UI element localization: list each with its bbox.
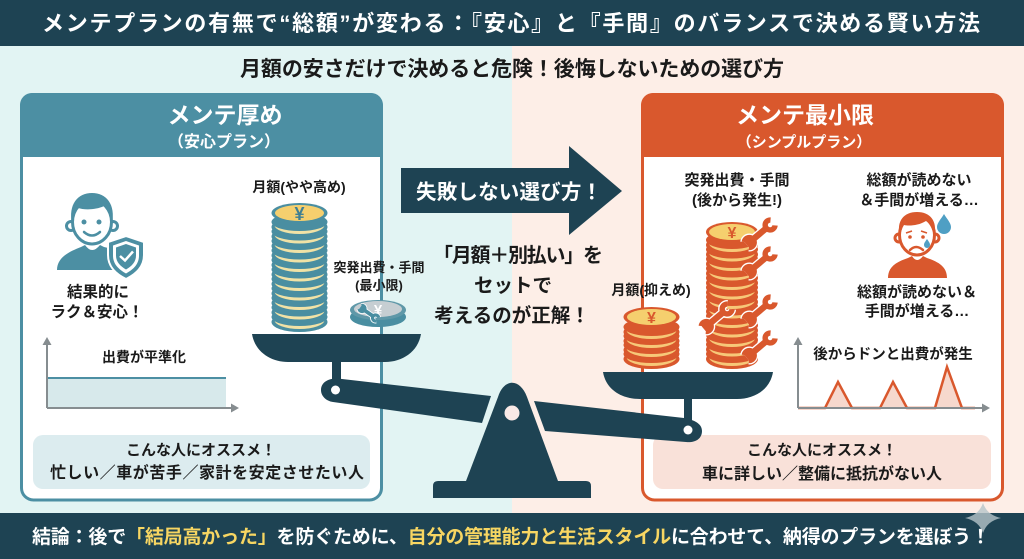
label: sudden costs later <box>684 171 790 209</box>
chart: flat spending: 出費が平準化 <box>102 349 186 365</box>
text: the right answer: 「月額＋別払い」を <box>433 244 603 267</box>
coin stack: monthly reduced: ¥ <box>647 310 656 327</box>
chart: spending spikes: 後からドンと出費が発生 <box>813 345 973 363</box>
icon: worried person with sweat drop <box>888 212 951 278</box>
callout: recommended for left <box>33 435 370 489</box>
left panel header: （安心プラン） <box>168 132 280 151</box>
text: easy and safe <box>50 282 144 321</box>
right panel header: メンテ最小限 <box>736 102 874 128</box>
scale fulcrum <box>433 383 591 498</box>
label: monthly higher: 月額(やや高め) <box>252 179 346 195</box>
label: sudden costs minimal <box>333 260 425 293</box>
left pan <box>252 334 421 384</box>
subtitle: 月額の安さだけで決めると危険！後悔しないための選び方 <box>240 58 784 81</box>
chart: spending spikes <box>794 337 990 412</box>
coin stack: monthly fee <box>272 203 328 332</box>
right panel frame <box>642 94 1002 500</box>
callout: recommended for right <box>653 435 991 489</box>
coin stack: monthly reduced <box>624 307 680 369</box>
conclusion bar <box>0 503 1024 559</box>
callout: recommended for left: こんな人にオススメ！ <box>126 442 276 459</box>
label: sudden costs later: 突発出費・手間 <box>684 171 790 189</box>
coin stack: monthly fee: ¥ <box>294 204 305 224</box>
right pan <box>603 372 773 423</box>
scale beam <box>321 378 702 442</box>
left panel frame <box>22 94 382 500</box>
icon: smiling person with shield <box>57 193 144 279</box>
label: sudden costs later: (後から発生!) <box>692 191 782 209</box>
text: the right answer: セットで <box>474 275 552 297</box>
text: total unclear repeated: 総額が読めない＆ <box>857 283 977 301</box>
right panel header <box>641 93 1004 157</box>
title bar: メンテプランの有無で“総額”が変わる：『安心』と『手間』のバランスで決める賢い方法 <box>42 11 980 36</box>
text: easy and safe: ラク＆安心！ <box>50 302 144 321</box>
callout: recommended for right: 車に詳しい／整備に抵抗がない人 <box>702 464 942 483</box>
label: sudden costs minimal: (最小限) <box>355 278 403 293</box>
icon: small coin with wrench: ¥ <box>374 302 383 319</box>
label: monthly reduced: 月額(抑えめ) <box>611 282 691 298</box>
label: total unclear: ＆手間が増える… <box>859 191 979 209</box>
balance scale <box>252 334 773 498</box>
label: sudden costs minimal: 突発出費・手間 <box>333 260 425 275</box>
panel: left plan <box>20 93 425 500</box>
left panel header: メンテ厚め <box>168 102 282 128</box>
callout: recommended for right: こんな人にオススメ！ <box>747 442 897 459</box>
icon: small coin with wrench <box>350 300 406 327</box>
label: total unclear: 総額が読めない <box>866 171 972 189</box>
text: the right answer <box>433 244 603 327</box>
label: total unclear <box>859 171 979 209</box>
conclusion bar: 結論：後で「結局高かった」を防ぐために、自分の管理能力と生活スタイルに合わせて、納得のプランを選ぼう！ <box>32 525 990 548</box>
coin stack with wrenches: sudden costs: ¥ <box>728 225 737 242</box>
text: total unclear repeated: 手間が増える… <box>865 302 969 320</box>
icon: sparkle <box>965 503 1001 533</box>
right panel header: （シンプルプラン） <box>737 134 871 151</box>
coin stack with wrenches: sudden costs <box>700 219 776 369</box>
title bar <box>0 0 1024 46</box>
callout: recommended for left: 忙しい／車が苦手／家計を安定させたい人 <box>50 463 364 482</box>
text: easy and safe: 結果的に <box>67 282 129 301</box>
left panel header <box>20 93 383 157</box>
text: the right answer: 考えるのが正解！ <box>434 304 590 327</box>
arrow: how to choose: 失敗しない選び方！ <box>416 181 602 204</box>
arrow: how to choose <box>401 146 622 235</box>
panel: right plan <box>611 93 1004 500</box>
text: total unclear repeated <box>857 283 977 320</box>
chart: flat spending <box>42 337 239 412</box>
